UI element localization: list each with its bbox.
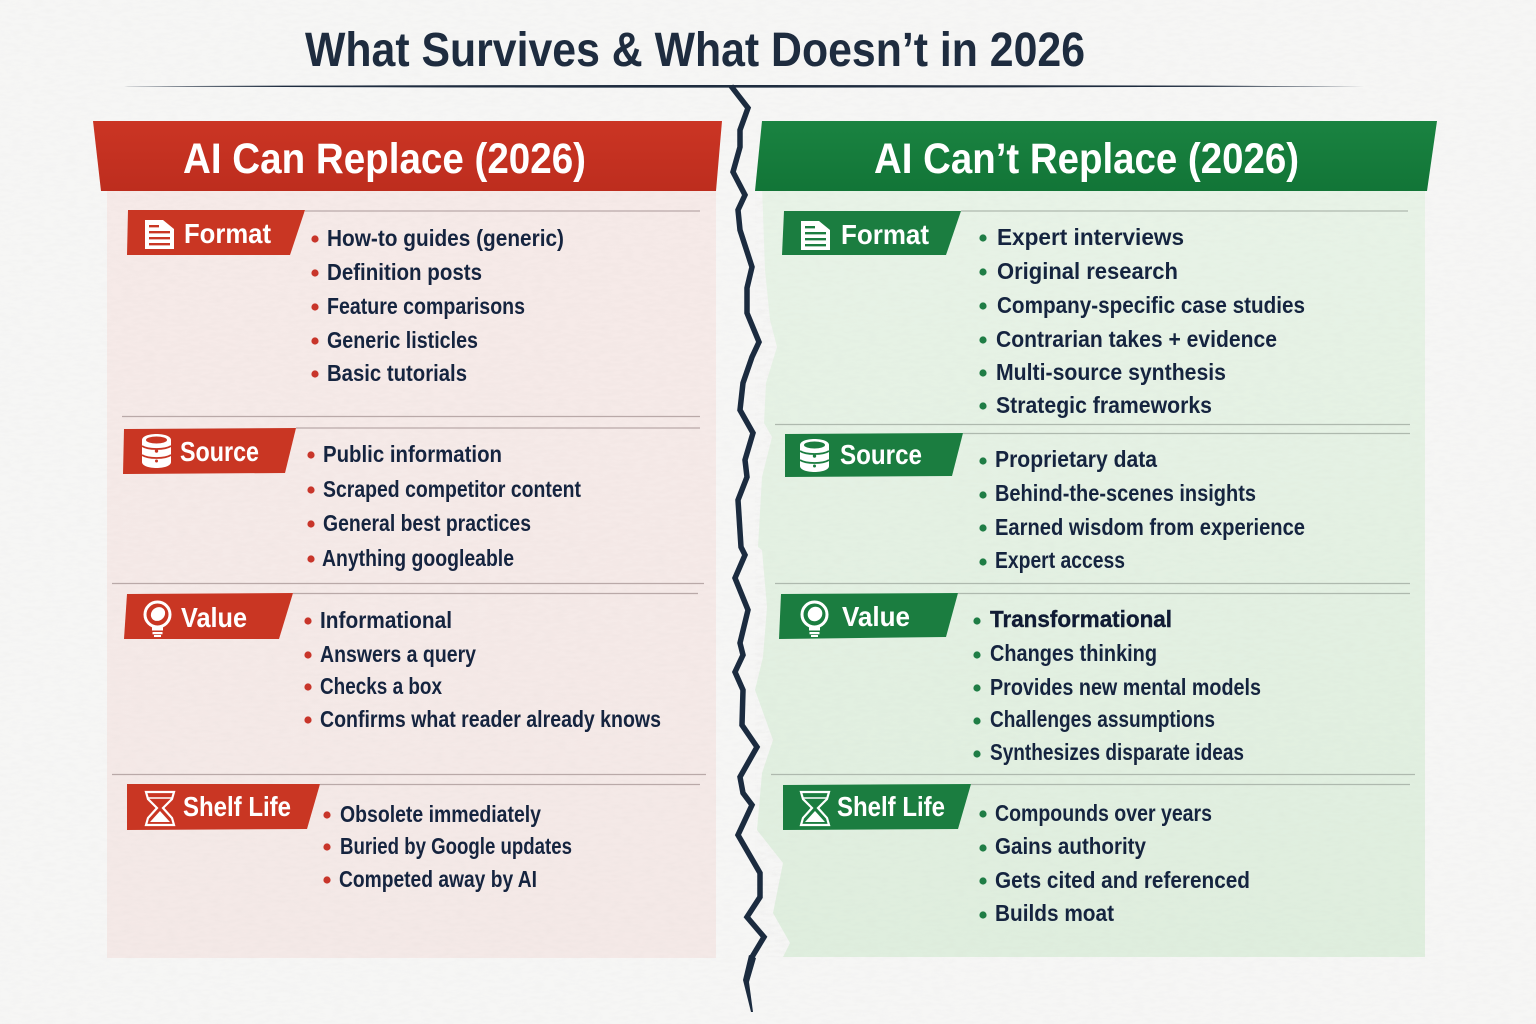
- icon: light bulb: [802, 602, 827, 637]
- list: value: Confirms what reader already knows: [320, 706, 661, 732]
- tag: value: Value: [842, 601, 910, 632]
- tag: source: [785, 433, 963, 477]
- list: format: Multi-source synthesis: [996, 359, 1226, 385]
- list: shelf life: Gains authority: [995, 833, 1146, 859]
- row: shelf life: [127, 784, 572, 892]
- list: source: General best practices: [323, 510, 531, 536]
- list: value: Provides new mental models: [990, 674, 1261, 700]
- list: value: Answers a query: [320, 641, 476, 667]
- tag: value: Value: [181, 602, 247, 633]
- list: source: [979, 446, 1305, 573]
- list: source: Anything googleable: [322, 545, 514, 571]
- list: shelf life: Obsolete immediately: [340, 801, 541, 827]
- list: format: Contrarian takes + evidence: [996, 326, 1277, 352]
- list: value: Checks a box: [320, 673, 442, 699]
- row: source: [123, 428, 581, 571]
- list: format: Definition posts: [327, 259, 482, 285]
- list: source: Scraped competitor content: [323, 476, 581, 502]
- tag: source: Source: [840, 439, 922, 470]
- list: format: Generic listicles: [327, 327, 478, 353]
- list: format: Original research: [997, 258, 1178, 284]
- header banner: AI Can't Replace: [755, 121, 1437, 191]
- list: shelf life: Gets cited and referenced: [995, 867, 1250, 893]
- list: shelf life: Compounds over years: [995, 800, 1212, 826]
- list: shelf life: [323, 801, 572, 892]
- tag: shelf life: Shelf Life: [183, 791, 291, 822]
- list: source: [307, 441, 581, 571]
- icon: hourglass: [801, 792, 829, 825]
- list: value: Informational: [320, 607, 452, 633]
- row: source: [785, 433, 1305, 573]
- tag: source: Source: [180, 436, 259, 467]
- tag: format: [782, 211, 961, 255]
- list: source: Proprietary data: [995, 446, 1158, 472]
- list: format: Strategic frameworks: [996, 392, 1212, 418]
- list: shelf life: Buried by Google updates: [340, 833, 572, 859]
- list: shelf life: [979, 800, 1250, 926]
- title rule: [124, 85, 1365, 88]
- header banner: AI Can't Replace: AI Can’t Replace (2026): [874, 135, 1299, 183]
- central crack: [731, 86, 764, 1012]
- row: value: [124, 593, 661, 732]
- tag: format: [127, 210, 305, 255]
- list: value: Changes thinking: [990, 640, 1157, 666]
- tag: shelf life: [127, 784, 320, 830]
- list: shelf life: Builds moat: [995, 900, 1114, 926]
- list: format: How-to guides (generic): [327, 225, 564, 251]
- panel: AI can't replace: [755, 121, 1437, 957]
- icon: database: [800, 439, 829, 472]
- list: source: Public information: [323, 441, 502, 467]
- icon: database: [142, 434, 171, 468]
- list: value: Synthesizes disparate ideas: [990, 739, 1244, 765]
- list: format: Basic tutorials: [327, 360, 467, 386]
- title: What Survives & What Doesn’t in 2026: [305, 24, 1085, 77]
- row: shelf life: [783, 784, 1250, 926]
- row: format: [127, 210, 564, 386]
- list: value: Challenges assumptions: [990, 706, 1215, 732]
- tag: source: [123, 428, 296, 474]
- list: format: [311, 225, 564, 386]
- list: source: Earned wisdom from experience: [995, 514, 1305, 540]
- tag: format: Format: [184, 218, 271, 249]
- header banner: AI Can Replace: [93, 121, 722, 191]
- list: value: Transformational: [990, 606, 1172, 632]
- list: value: [973, 606, 1261, 765]
- icon: hourglass: [146, 792, 174, 825]
- header banner: AI Can Replace: AI Can Replace (2026): [183, 135, 586, 183]
- tag: value: [124, 593, 293, 639]
- tag: shelf life: Shelf Life: [837, 791, 945, 822]
- list: value: [304, 607, 661, 732]
- panel: AI can replace: [93, 121, 722, 958]
- tag: shelf life: [783, 784, 971, 830]
- list: source: Expert access: [995, 547, 1125, 573]
- list: format: Feature comparisons: [327, 293, 525, 319]
- row: format: [782, 211, 1305, 418]
- icon: light bulb: [145, 602, 170, 637]
- tag: value: [779, 593, 958, 639]
- list: source: Behind-the-scenes insights: [995, 480, 1256, 506]
- icon: document: [801, 221, 830, 250]
- list: format: Company-specific case studies: [997, 292, 1305, 318]
- list: format: [979, 224, 1305, 418]
- icon: document: [145, 220, 174, 249]
- list: format: Expert interviews: [997, 224, 1184, 250]
- row: value: [779, 593, 1261, 765]
- tag: format: Format: [841, 219, 929, 250]
- list: shelf life: Competed away by AI: [339, 866, 537, 892]
